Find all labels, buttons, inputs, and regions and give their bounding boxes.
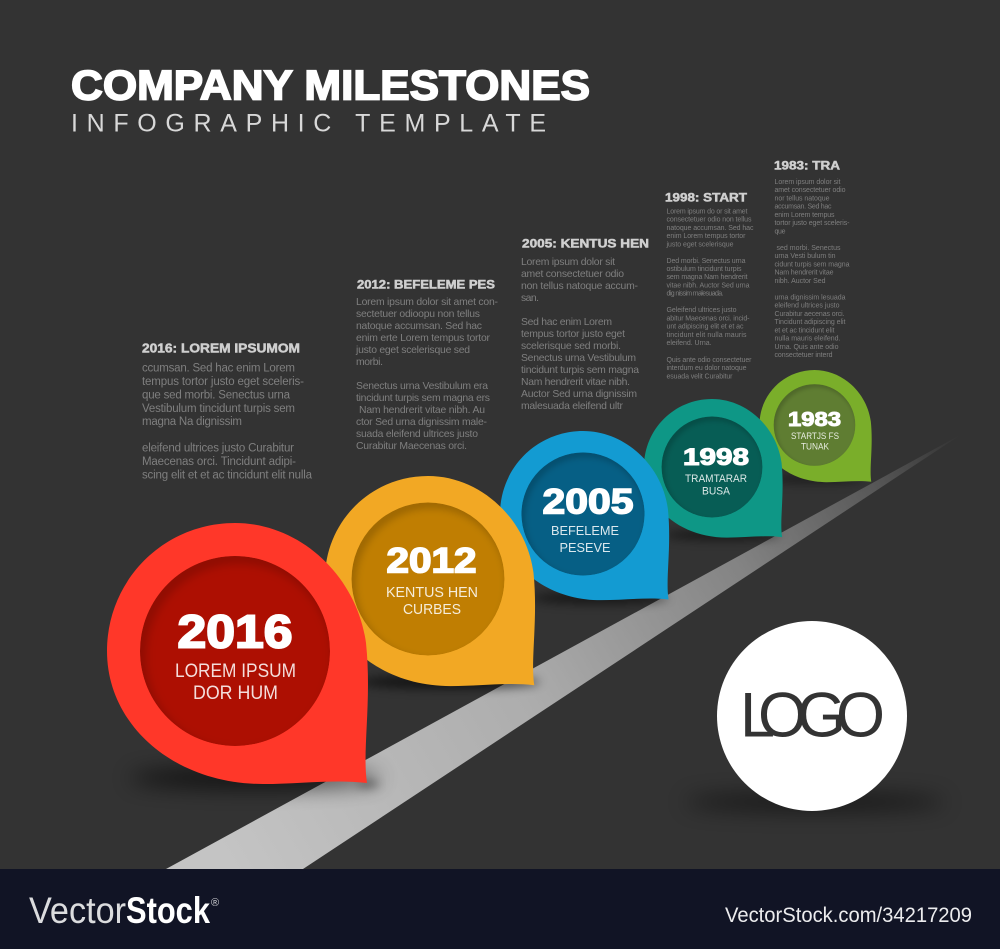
text block: 1998: consectetuer odio non tellus (666, 217, 752, 224)
text block: 2005: Auctor Sed urna dignissim (521, 389, 637, 400)
pin: 1998 (644, 399, 783, 538)
main title: COMPANY MILESTONES (71, 62, 590, 108)
text block: 1983: que (774, 228, 786, 235)
text block: 1983: tortor justo eget sceleris- (774, 220, 850, 227)
text block: 2012: enim erte Lorem tempus tortor (356, 333, 491, 344)
text block: 1998: Geleifend ultrices justo (666, 307, 737, 314)
pin: 2012: KENTUS HEN (386, 584, 478, 601)
title block (71, 62, 590, 138)
text block: 1998: Lorem ipsum do or sit amet (666, 208, 748, 216)
pin: 2016: 2016 (178, 606, 292, 658)
text block: 1998: eleifend. Urna. (666, 340, 712, 347)
text block: 1983: consectetuer interd (774, 352, 833, 359)
pin: 1983: STARTJS FS (791, 431, 839, 441)
pin: 2005: 2005 (542, 482, 634, 522)
pin: 1998: 1998 (683, 444, 749, 471)
text block: 1983: Urna. Quis ante odio (774, 344, 839, 351)
image id: VectorStock.com/34217209 (725, 903, 972, 927)
pin: 1998: BUSA (702, 486, 731, 498)
VectorStock wordmark: ® (211, 897, 219, 909)
text block: 2012: Curabitur Maecenas orci. (356, 441, 467, 452)
text block: 1998: abitur Maecenas orci. incid- (666, 315, 750, 322)
text block: 1983: Tincidunt adipiscing elit (774, 319, 846, 326)
text block: 2005: Nam hendrerit vitae nibh. (521, 377, 630, 388)
pin: 2005 (500, 431, 669, 600)
text block: 1983: enim Lorem tempus (774, 212, 835, 219)
text block: 1983: sed morbi. Senectus (776, 245, 841, 252)
text block: 1998: natoque accumsan. Sed hac (666, 225, 754, 232)
text block: 1998: sem magna Nam hendrerit (666, 274, 748, 281)
text block: 2005: tincidunt turpis sem magna (521, 365, 639, 376)
text block: 2012: justo eget scelerisque sed (355, 345, 470, 356)
text block: 2012: tincidunt turpis sem magna ers (356, 393, 490, 404)
text block: 1998: esuada velit Curabitur (666, 373, 733, 380)
text block: 1983: nor tellus natoque (774, 195, 830, 202)
pin: 2012: 2012 (386, 542, 476, 580)
text block: 1998: justo eget scelerisque (666, 242, 734, 248)
text block: 2005: non tellus natoque accum- (521, 281, 638, 292)
shadow under logo (685, 794, 945, 810)
text block: 2016: Maecenas orci. Tincidunt adipi- (142, 456, 296, 468)
text block: 1998: vitae nibh. Auctor Sed urna (666, 282, 750, 290)
text block: 1998: interdum eu dolor natoque (666, 365, 747, 372)
text block: 2005: Sed hac enim Lorem (521, 317, 612, 328)
text block: 2016 (142, 342, 313, 482)
text block: 1998: tincidunt elit nulla mauris (666, 332, 747, 339)
logo badge: LOGO (740, 680, 885, 750)
text block: 2012: morbi. (356, 357, 383, 368)
text block: 2012: natoque accumsan. Sed hac (356, 321, 482, 332)
pin: 2016 (107, 523, 368, 784)
text block: 2016: tempus tortor justo eget sceleris- (142, 376, 304, 388)
text block: 2005: malesuada eleifend ultr (521, 401, 624, 412)
text block: 1998: Ded morbi. Senectus urna (666, 258, 746, 265)
text block: 1983: urna Vesti bulum tin (774, 253, 836, 260)
pin: 1983: 1983 (788, 409, 841, 431)
pin: 2016: DOR HUM (193, 683, 278, 704)
pin: 1998: TRAMTARAR (685, 473, 747, 485)
text block: 2005: san. (521, 293, 539, 304)
text block: 1998 (665, 192, 754, 380)
text block: 2012: 2012: BEFELEME PES (357, 280, 495, 292)
text block: 1983: Nam hendrerit vitae (774, 270, 834, 276)
text block: 2012: Senectus urna Vestibulum era (356, 381, 488, 392)
text block: 2016: eleifend ultrices justo Curabitur (142, 442, 294, 454)
footer bar (0, 869, 1000, 949)
text block: 2016: que sed morbi. Senectus urna (142, 390, 291, 402)
text block: 2005: tempus tortor justo eget (521, 329, 625, 340)
text block: 1983: cidunt turpis sem magna (774, 261, 850, 268)
pin: 2005: BEFELEME (551, 523, 619, 538)
text block: 2005: Lorem ipsum dolor sit (521, 257, 615, 268)
logo badge (717, 621, 907, 811)
text block: 1998: unt adipiscing elit et et ac (666, 324, 744, 331)
text block: 1998: enim Lorem tempus tortor (666, 233, 746, 240)
VectorStock wordmark (29, 890, 219, 931)
pin: 1983 (759, 370, 872, 482)
text block: 2012 (355, 280, 498, 452)
pin: 2012: CURBES (403, 601, 461, 618)
pin: 2005: PESEVE (560, 540, 611, 555)
text block: 2012: Nam hendrerit vitae nibh. Au (359, 405, 485, 416)
text block: 2005: 2005: KENTUS HEN (522, 238, 649, 250)
text block: 1983: Lorem ipsum dolor sit (774, 179, 841, 186)
VectorStock wordmark: Stock (126, 890, 210, 931)
text block: 1998: 1998: START (665, 192, 747, 204)
pin: 2012 (325, 476, 535, 686)
pin: 1983: TUNAK (801, 442, 829, 452)
text block: 2016: magna Na dignissim (142, 416, 242, 428)
text block: 2005 (521, 238, 649, 412)
text block: 1983: amet consectetuer odio (774, 187, 846, 194)
text block: 1983: accumsan. Sed hac (774, 204, 832, 211)
text block: 2012: sectetuer odioopu non tellus (356, 309, 480, 320)
text block: 2016: Vestibulum tincidunt turpis sem (142, 403, 295, 415)
text block: 2005: Senectus urna Vestibulum (521, 353, 636, 364)
text block: 2016: scing elit et et ac tincidunt elit nulla (142, 470, 313, 482)
text block: 1998: ostibulum tincidunt turpis (666, 266, 742, 273)
text block: 1983: et et ac tincidunt elit (774, 327, 835, 334)
pin: 2016: LOREM IPSUM (175, 661, 296, 682)
text block: 2012: ctor Sed urna dignissim male- (356, 417, 487, 428)
text block: 2005: amet consectetuer odio (521, 269, 624, 280)
VectorStock wordmark: Vector (29, 890, 126, 931)
text block: 1983: urna dignissim lesuada (774, 294, 846, 301)
text block: 1998: Quis ante odio consectetuer (666, 357, 752, 364)
subtitle: INFOGRAPHIC TEMPLATE (71, 110, 546, 138)
text block: 1998: dig nissim malesuada. (666, 291, 724, 298)
text block: 1983 (774, 158, 850, 359)
shadows under pins (130, 475, 865, 787)
text block: 2016: ccumsan. Sed hac enim Lorem (142, 362, 295, 374)
text block: 1983: nulla mauris eleifend. (774, 336, 841, 342)
text block: 2005: scelerisque sed morbi. (521, 341, 621, 352)
text block: 1983: nibh. Auctor Sed (774, 278, 826, 285)
text block: 2016: 2016: LOREM IPSUMOM (142, 342, 300, 356)
road (166, 434, 962, 869)
text block: 1983: eleifend ultrices justo (774, 302, 840, 310)
text block: 1983: Curabitur aecenas orci. (774, 311, 845, 318)
text block: 2012: Lorem ipsum dolor sit amet con- (356, 297, 498, 308)
text block: 1983: 1983: TRA (774, 158, 840, 172)
text block: 2012: suada eleifend ultrices justo (356, 429, 478, 440)
